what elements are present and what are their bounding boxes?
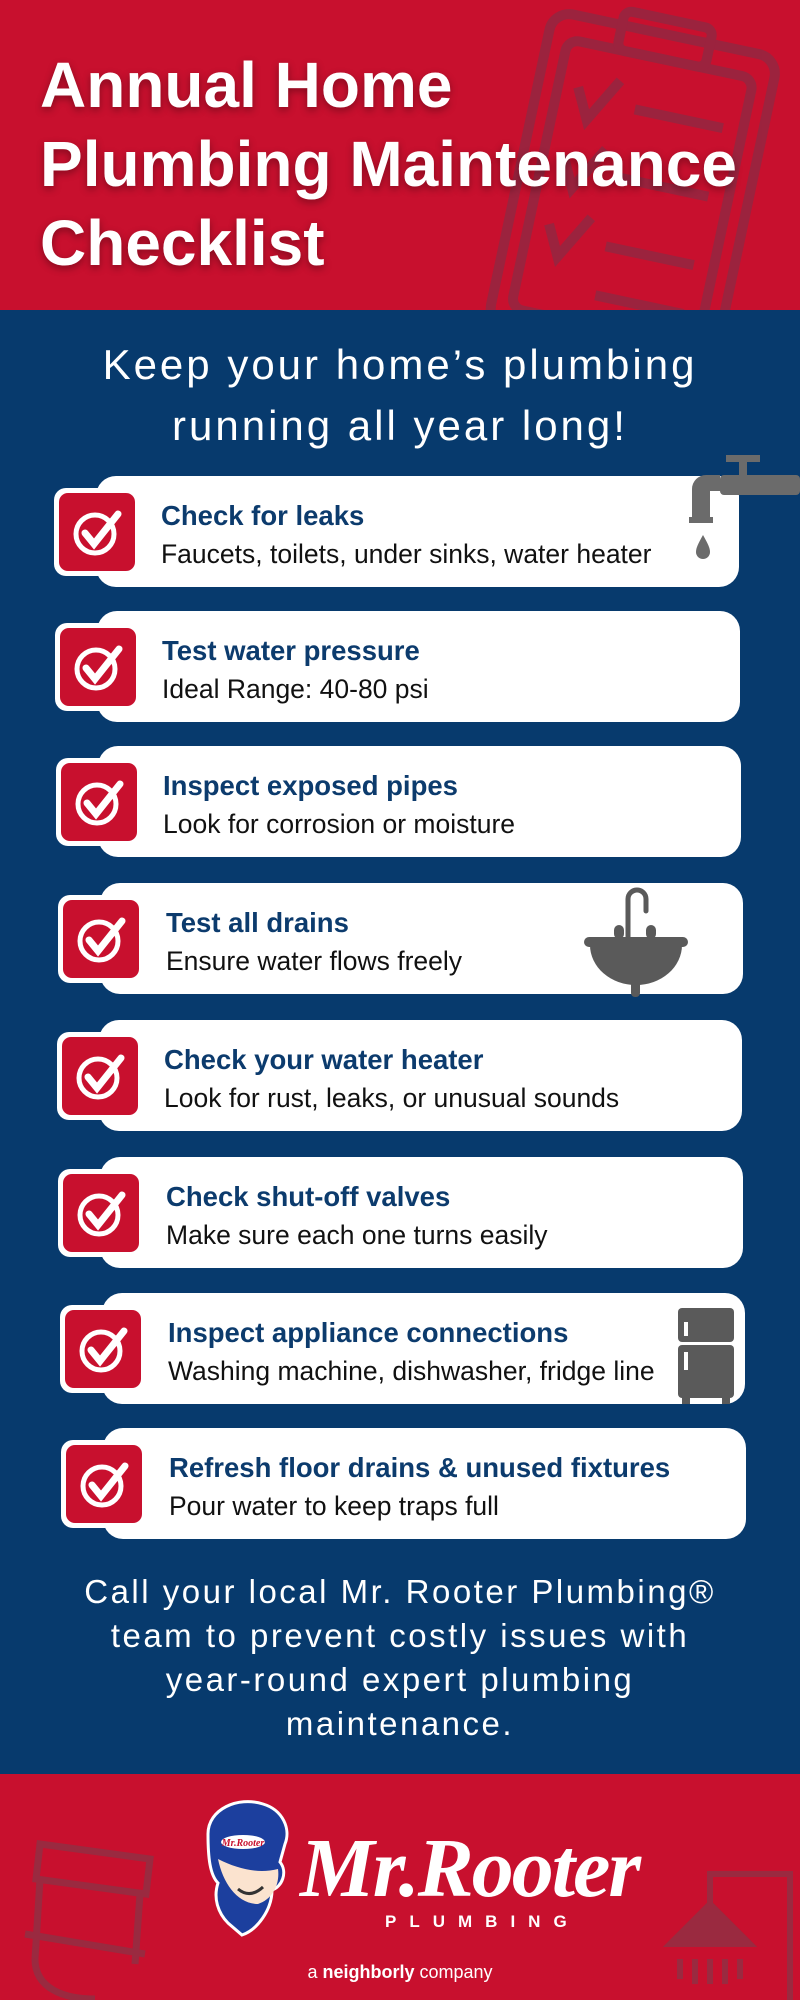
checklist item 1 [54,476,739,587]
title: Plumbing Maintenance [40,128,737,200]
checklist item 8 [61,1428,746,1539]
checklist item 5: Check your water heater [164,1044,483,1075]
checklist item 8: Pour water to keep traps full [169,1491,499,1521]
footer panel [0,1774,800,2000]
icon: clipboard watermark [486,6,780,310]
closing call to action [84,1573,716,1742]
checklist item 3: Look for corrosion or moisture [163,809,515,839]
logo: mascot: Mr.Rooter [221,1838,264,1849]
checklist item 3: Inspect exposed pipes [163,770,458,801]
title: Checklist [40,207,325,279]
icon: shower watermark [663,1871,793,2000]
checklist item 3 [56,746,741,857]
checklist item 4: Ensure water flows freely [166,946,462,976]
checklist item 4: Test all drains [166,907,349,938]
subtitle [103,341,697,449]
header panel [0,0,800,310]
checklist item 2 [55,611,740,722]
logo: neighborly tagline: a neighborly company [307,1962,493,1982]
checklist item 1: Check for leaks [161,500,364,531]
subtitle: Keep your home’s plumbing [103,341,697,388]
icon: sink [584,888,688,997]
checklist item 5: Look for rust, leaks, or unusual sounds [164,1083,619,1113]
logo: mascot [206,1800,288,1937]
checklist item 6 [58,1157,743,1268]
icon: fridge [678,1308,734,1404]
checklist item 5 [57,1020,742,1131]
closing call to action: year-round expert plumbing [166,1661,634,1698]
icon: faucet [689,455,800,559]
closing call to action: maintenance. [286,1705,514,1742]
checklist item 7 [60,1293,745,1404]
checklist item 8: Refresh floor drains & unused fixtures [169,1452,670,1483]
subtitle: running all year long! [172,402,628,449]
checklist item 1: Faucets, toilets, under sinks, water heater [161,539,651,569]
logo: plumbing: PLUMBING [385,1912,580,1931]
checklist item 7: Washing machine, dishwasher, fridge line [168,1356,655,1386]
icon: toilet watermark [24,1840,154,2000]
closing call to action: Call your local Mr. Rooter Plumbing® [84,1573,716,1610]
checklist item 2: Test water pressure [162,635,420,666]
title: Annual Home [40,49,452,121]
closing call to action: team to prevent costly issues with [111,1617,689,1654]
checklist item 6: Check shut-off valves [166,1181,450,1212]
checklist item 2: Ideal Range: 40-80 psi [162,674,429,704]
checklist item 7: Inspect appliance connections [168,1317,568,1348]
logo: wordmark: Mr.Rooter [300,1822,639,1915]
checklist item 4 [58,883,743,994]
title [38,49,738,279]
checklist item 6: Make sure each one turns easily [166,1220,548,1250]
